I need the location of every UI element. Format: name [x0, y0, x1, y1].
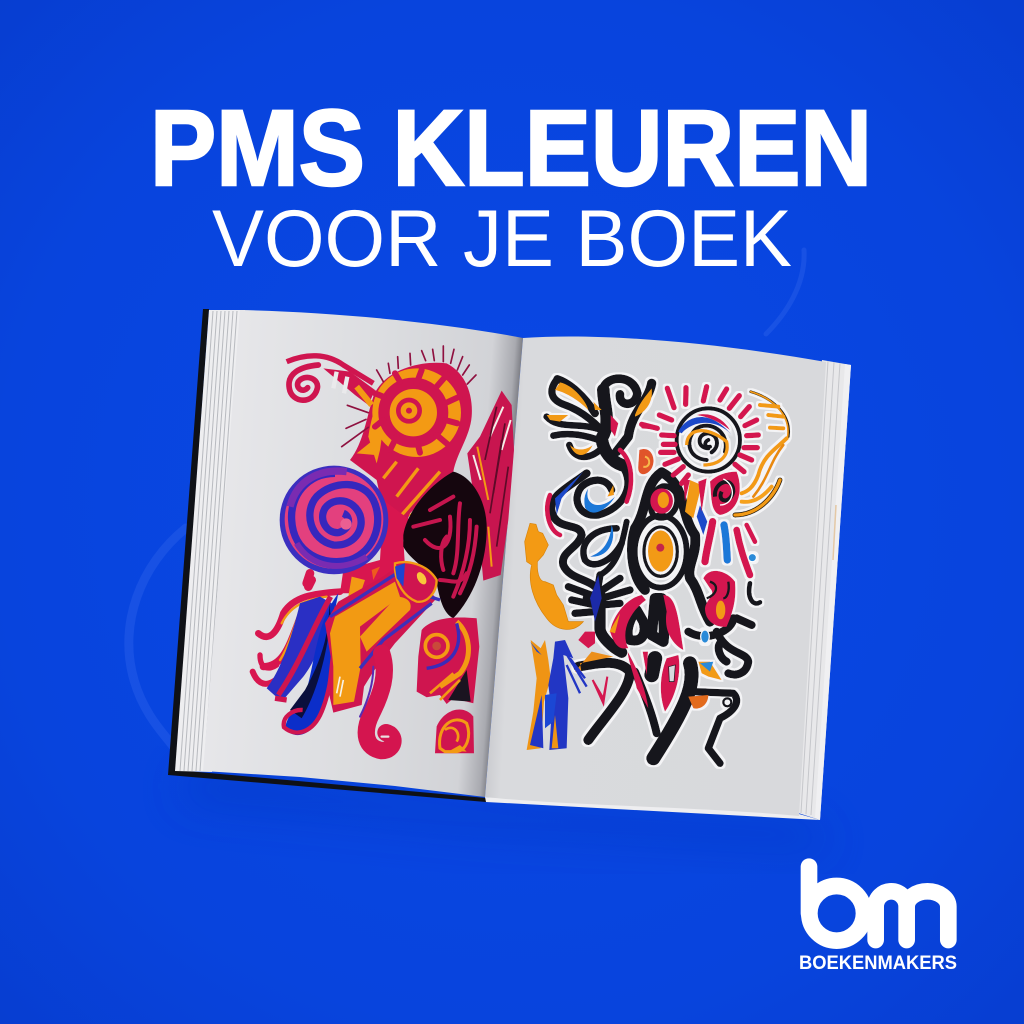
- body connector: [340, 500, 410, 593]
- bug centre: [590, 575, 602, 622]
- bug rays: [568, 575, 630, 613]
- back cover edge: [168, 309, 486, 802]
- right page artwork: [525, 379, 789, 763]
- upper left branch: [557, 379, 595, 413]
- book shadow: [180, 770, 830, 850]
- bottom spiral shape: [435, 710, 474, 753]
- right page: [485, 337, 826, 816]
- drips: [705, 522, 755, 575]
- logo mark bm: [809, 867, 948, 941]
- lower pink panels: [610, 595, 646, 649]
- pink curls: [685, 480, 702, 518]
- open book: [168, 309, 851, 820]
- black figure: [547, 379, 789, 763]
- orange hand: [525, 523, 583, 629]
- title line 2: VOOR JE BOEK: [212, 194, 792, 284]
- title: [150, 87, 872, 284]
- right leg: [653, 663, 692, 758]
- sun colours: [678, 417, 732, 435]
- feather shape: [467, 391, 514, 581]
- flame right: [735, 392, 789, 515]
- sun rays: [642, 387, 758, 483]
- left page artwork: [253, 346, 514, 753]
- sun rays: [342, 346, 476, 447]
- colour fills: [547, 382, 652, 455]
- left leg: [578, 663, 630, 740]
- lower body arcs: [688, 618, 752, 675]
- small figures: [527, 640, 587, 750]
- long spine: [551, 473, 600, 595]
- small hook: [749, 583, 760, 603]
- orange leg: [325, 562, 440, 713]
- central totem: [662, 472, 710, 622]
- blue and black stream: [267, 593, 338, 735]
- totem eyes: [650, 488, 673, 514]
- logo: boekenmakers: [799, 867, 957, 974]
- sun figure: [350, 363, 472, 540]
- sun ring: [677, 408, 740, 472]
- small blue eye: [701, 630, 709, 643]
- blue crescent: [584, 488, 615, 513]
- spiral disc: [280, 466, 388, 574]
- lower stem curl: [360, 653, 393, 751]
- tentacles left: [253, 573, 340, 684]
- left page stack: [175, 310, 245, 772]
- lower right shape: [417, 618, 479, 704]
- right page stack: [795, 360, 851, 820]
- black blob: [403, 472, 487, 618]
- left page: [203, 310, 523, 797]
- logo wordmark: BOEKENMAKERS: [799, 952, 957, 974]
- curl with stripes: [287, 356, 375, 405]
- title line 1: PMS KLEUREN: [150, 87, 872, 208]
- orange beak and splatter: [575, 652, 613, 673]
- bottom page edge: [485, 797, 820, 820]
- pink blob: [703, 571, 735, 627]
- decorative swirls: [129, 250, 804, 745]
- blue orange bird: [698, 662, 722, 680]
